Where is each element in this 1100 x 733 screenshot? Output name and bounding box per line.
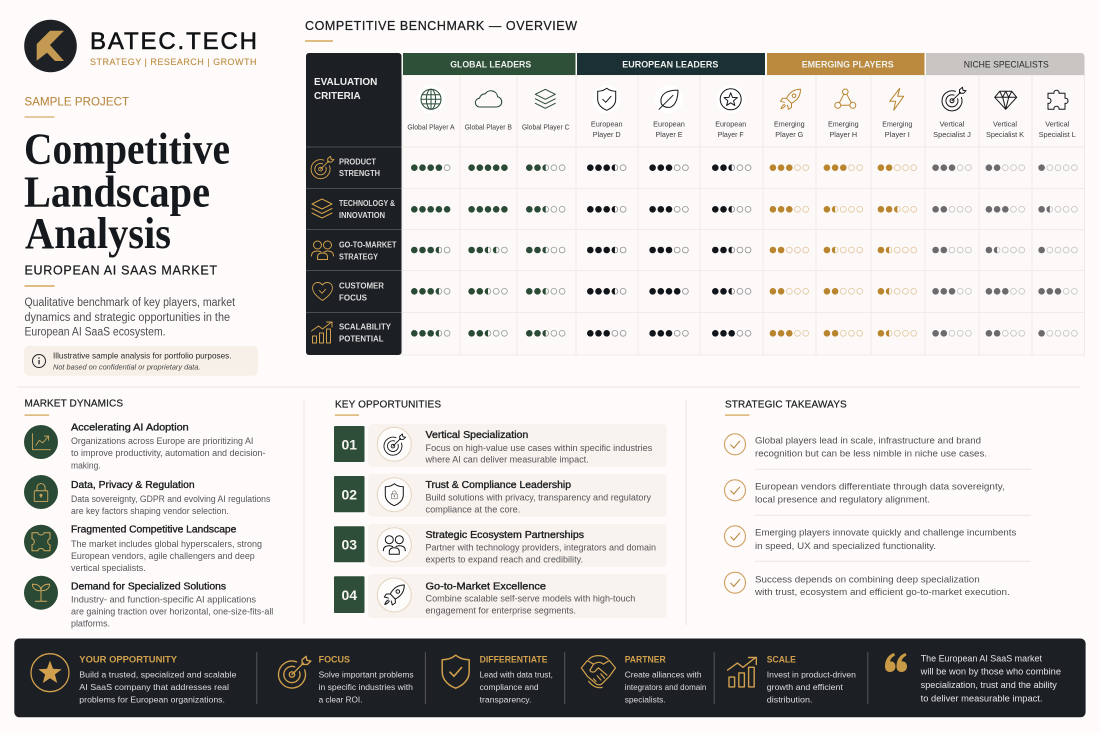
band: european leaders: EUROPEAN LEADERS <box>622 59 718 70</box>
player K: Vertical <box>993 120 1017 129</box>
takeaway 2 <box>724 480 1005 506</box>
takeaway 1 <box>724 434 987 460</box>
player H <box>828 89 859 139</box>
player F <box>715 85 746 139</box>
focus: Solve important problems <box>319 669 414 679</box>
sample project label <box>24 97 129 118</box>
player B: Global Player B <box>465 122 512 131</box>
opportunity 02 <box>334 474 667 517</box>
quote: to deliver measurable impact. <box>921 694 1042 704</box>
item: fragmented competitive landscape <box>24 525 262 573</box>
band: niche specialists: NICHE SPECIALISTS <box>964 59 1049 70</box>
takeaway 1: recognition but can be less nimble in niche use cases. <box>755 449 987 460</box>
opportunity 02: 02 <box>342 486 357 502</box>
player H: Emerging <box>828 120 859 129</box>
player F: Player F <box>718 130 744 139</box>
item: accelerating AI adoption: to improve productivity, automation and decision- <box>71 448 266 458</box>
title: Analysis <box>25 208 171 258</box>
panel: market dynamics <box>24 399 273 629</box>
partner: PARTNER <box>625 654 666 665</box>
logo <box>24 20 77 72</box>
quote <box>885 653 1061 704</box>
differentiate: compliance and <box>480 682 539 692</box>
band: global leaders <box>403 53 576 75</box>
player C: Global Player C <box>522 122 570 131</box>
differentiate: DIFFERENTIATE <box>480 654 548 665</box>
sample project label: SAMPLE PROJECT <box>24 97 129 109</box>
band: global leaders: GLOBAL LEADERS <box>450 59 531 70</box>
opportunity 02: Trust & Compliance Leadership <box>426 480 571 491</box>
player I: Emerging <box>882 120 912 129</box>
opportunity 04: Go-to-Market Excellence <box>426 581 546 592</box>
focus: FOCUS <box>319 654 350 665</box>
benchmark table <box>306 53 1084 355</box>
heading: market dynamics: MARKET DYNAMICS <box>24 399 123 410</box>
opportunity 01 <box>334 424 667 467</box>
player G <box>774 89 805 139</box>
item: fragmented competitive landscape: Fragmented Competitive Landscape <box>71 525 237 536</box>
criterion: product strength: STRENGTH <box>339 169 380 178</box>
band: emerging players: EMERGING PLAYERS <box>802 59 894 70</box>
differentiate: Lead with data trust, <box>480 669 553 679</box>
takeaway 4 <box>724 572 1010 598</box>
title: Competitive <box>24 123 230 173</box>
heading: key opportunities: KEY OPPORTUNITIES <box>335 399 441 410</box>
player H: Player H <box>829 130 857 139</box>
criterion: customer focus: FOCUS <box>339 293 368 302</box>
player E: European <box>653 120 685 129</box>
description: European AI SaaS ecosystem. <box>24 327 166 339</box>
criteria column: EVALUATION <box>314 76 377 88</box>
description: Qualitative benchmark of key players, market <box>24 297 236 309</box>
player D: European <box>591 120 623 129</box>
item: demand for specialized solutions: Industry- and function-specific AI applications <box>71 594 257 604</box>
criterion: scalability potential <box>312 322 392 343</box>
player D: Player D <box>593 130 621 139</box>
criterion: go-to-market strategy: STRATEGY <box>339 252 379 261</box>
player D <box>591 85 623 139</box>
your opportunity: Build a trusted, specialized and scalable <box>79 669 237 679</box>
heading: strategic takeaways <box>725 400 847 416</box>
item: accelerating AI adoption: making. <box>71 460 101 470</box>
criterion: scalability potential: POTENTIAL <box>339 334 384 343</box>
opportunity 01: Vertical Specialization <box>426 430 528 441</box>
opportunity 03: experts to expand reach and credibility. <box>426 554 583 564</box>
subtitle: EUROPEAN AI SAAS MARKET <box>24 263 217 277</box>
opportunity 03: Strategic Ecosystem Partnerships <box>426 530 584 541</box>
player E: Player E <box>656 130 683 139</box>
focus: in specific industries with <box>319 682 413 692</box>
player I <box>882 88 912 139</box>
note box <box>24 346 258 376</box>
band: niche specialists <box>926 53 1084 75</box>
item: data, privacy and regulation: are key factors shaping vendor selection. <box>71 506 229 516</box>
brand name: STRATEGY | RESEARCH | GROWTH <box>90 57 256 67</box>
criterion: customer focus: CUSTOMER <box>339 282 384 291</box>
opportunity 03 <box>334 524 667 567</box>
opportunity 01: 01 <box>342 436 357 452</box>
player L <box>1039 90 1076 139</box>
brand name <box>90 28 257 67</box>
your opportunity <box>31 654 237 705</box>
focus: a clear ROI. <box>319 695 362 705</box>
item: data, privacy and regulation: Data sovereignty, GDPR and evolving AI regulations <box>71 494 271 504</box>
takeaway 4: Success depends on combining deep specialization <box>755 574 980 585</box>
player J: Specialist J <box>933 130 971 139</box>
criterion: scalability potential: SCALABILITY <box>339 322 392 331</box>
partner: integrators and domain <box>625 682 707 692</box>
ratings: technology and innovation <box>411 206 1077 213</box>
item: fragmented competitive landscape: vertical specialists. <box>71 563 146 573</box>
player G: Emerging <box>774 120 805 129</box>
player C <box>522 89 570 131</box>
item: accelerating AI adoption: Organizations across Europe are prioritizing AI <box>71 436 253 446</box>
band: emerging players <box>767 53 924 75</box>
criterion: product strength: PRODUCT <box>339 157 376 166</box>
player F: European <box>715 120 746 129</box>
takeaway 3: in speed, UX and specialized functionality. <box>755 541 936 552</box>
item: fragmented competitive landscape: European vendors, agile challengers and deep <box>71 551 255 561</box>
item: demand for specialized solutions: Demand for Specialized Solutions <box>71 581 226 592</box>
differentiate: transparency. <box>480 695 531 705</box>
your opportunity: problems for European organizations. <box>79 695 225 705</box>
title: Landscape <box>24 167 210 217</box>
table grid <box>402 75 1084 355</box>
quote: The European AI SaaS market <box>921 653 1042 663</box>
heading: strategic takeaways: STRATEGIC TAKEAWAYS <box>725 400 847 411</box>
title <box>24 123 230 258</box>
takeaway 4: with trust, ecosystem and efficient go-to-market execution. <box>754 587 1010 598</box>
item: fragmented competitive landscape: The market includes global hyperscalers, strong <box>71 539 262 549</box>
item: data, privacy and regulation <box>24 475 271 516</box>
opportunity 04: Combine scalable self-serve models with high-touch <box>426 594 635 604</box>
criterion: product strength <box>311 156 380 179</box>
ratings: customer focus <box>411 288 1077 295</box>
your opportunity: YOUR OPPORTUNITY <box>79 654 178 665</box>
partner: Create alliances with <box>625 669 702 679</box>
item: demand for specialized solutions: are gaining traction over horizontal, one-size-fits-all <box>71 607 273 617</box>
heading: key opportunities <box>335 399 441 416</box>
criterion: technology and innovation <box>312 199 395 220</box>
bottom banner <box>14 638 1086 717</box>
quote: specialization, trust and the ability <box>921 680 1057 690</box>
note box: Illustrative sample analysis for portfolio purposes. <box>53 351 232 361</box>
differentiate <box>442 654 553 705</box>
criterion: go-to-market strategy: GO-TO-MARKET <box>339 241 397 250</box>
panel: strategic takeaways <box>724 400 1031 598</box>
player A: Global Player A <box>407 122 455 131</box>
scale <box>728 654 856 705</box>
takeaway 2: local presence and regulatory alignment. <box>755 495 930 506</box>
your opportunity: AI SaaS company that addresses real <box>79 682 229 692</box>
player K <box>986 91 1024 139</box>
takeaway 1: Global players lead in scale, infrastructure and brand <box>755 435 981 446</box>
player B <box>465 91 512 131</box>
band: european leaders <box>577 53 765 75</box>
player K: Specialist K <box>986 130 1024 139</box>
opportunity 03: 03 <box>342 536 357 552</box>
focus <box>278 654 414 705</box>
scale: growth and efficient <box>767 682 843 692</box>
opportunity 03: Partner with technology providers, integrators and domain <box>426 542 656 552</box>
item: accelerating AI adoption: Accelerating AI Adoption <box>71 423 189 434</box>
ratings: product strength <box>411 164 1077 171</box>
takeaway 3 <box>724 526 1017 552</box>
criteria column: CRITERIA <box>314 90 361 102</box>
player E <box>653 85 685 139</box>
description: dynamics and strategic opportunities in the <box>24 312 230 324</box>
ratings: scalability potential <box>411 330 1077 337</box>
scale: Invest in product-driven <box>767 669 856 679</box>
player L: Vertical <box>1045 120 1070 129</box>
ratings: go-to-market strategy <box>411 247 1077 253</box>
note box: Not based on confidential or proprietary data. <box>53 362 200 371</box>
criteria column <box>306 53 402 355</box>
takeaway 2: European vendors differentiate through data sovereignty, <box>755 481 1005 492</box>
description <box>24 297 236 339</box>
opportunity 01: Focus on high-value use cases within specific industries <box>426 443 653 453</box>
opportunity 04: engagement for enterprise segments. <box>426 605 576 615</box>
player J: Vertical <box>940 120 965 129</box>
brand name: BATEC.TECH <box>90 28 257 55</box>
heading: market dynamics <box>24 399 123 416</box>
takeaway 3: Emerging players innovate quickly and challenge incumbents <box>755 528 1017 539</box>
opportunity 02: compliance at the core. <box>426 504 520 514</box>
opportunity 02: Build solutions with privacy, transparency and regulatory <box>426 493 652 503</box>
benchmark heading: COMPETITIVE BENCHMARK — OVERVIEW <box>305 19 577 33</box>
item: accelerating AI adoption <box>24 423 266 470</box>
criterion: customer focus <box>313 282 384 302</box>
quote: will be won by those who combine <box>920 667 1061 677</box>
item: demand for specialized solutions: platforms. <box>71 619 110 629</box>
player I: Player I <box>885 130 910 139</box>
player G: Player G <box>775 130 804 139</box>
partner <box>581 654 707 705</box>
panel: key opportunities <box>334 399 667 618</box>
player A <box>407 85 455 131</box>
item: demand for specialized solutions <box>24 576 273 629</box>
opportunity 01: where AI can deliver measurable impact. <box>424 455 589 465</box>
criterion: technology and innovation: TECHNOLOGY & <box>339 199 395 208</box>
opportunity 04: 04 <box>342 587 357 603</box>
criterion: technology and innovation: INNOVATION <box>339 211 385 220</box>
criterion: go-to-market strategy <box>312 241 397 261</box>
partner: specialists. <box>625 695 666 705</box>
player J <box>933 87 971 139</box>
scale: distribution. <box>767 695 812 705</box>
scale: SCALE <box>767 654 796 665</box>
player L: Specialist L <box>1039 130 1076 139</box>
opportunity 04 <box>334 574 667 618</box>
item: data, privacy and regulation: Data, Privacy & Regulation <box>71 480 195 491</box>
